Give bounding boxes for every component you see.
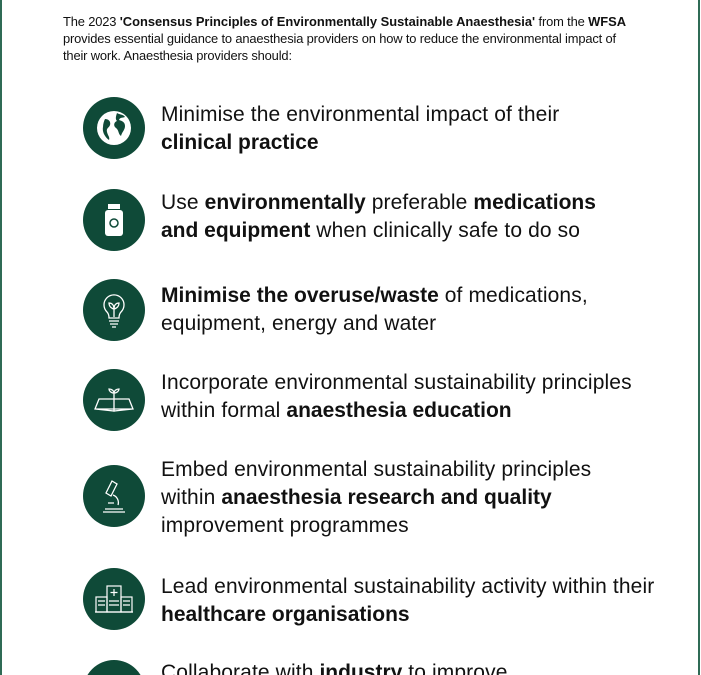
text: clinical practice	[161, 131, 319, 154]
intro text	[63, 14, 626, 63]
item 5: research	[83, 458, 591, 537]
text	[161, 458, 591, 537]
icon: circle	[83, 660, 145, 675]
text: within anaesthesia research and quality	[161, 486, 552, 509]
item 3: overuse	[83, 279, 588, 341]
text	[161, 371, 632, 422]
item 4: education	[83, 369, 632, 431]
text: Minimise the overuse/waste of medications,	[161, 284, 588, 307]
intro text: their work. Anaesthesia providers should:	[63, 48, 292, 63]
text: improvement programmes	[161, 514, 409, 537]
icon: microscope	[83, 465, 145, 527]
text: Incorporate environmental sustainability principles	[161, 371, 632, 394]
icon: globe	[83, 97, 145, 159]
text	[161, 191, 596, 242]
item 7: industry (cut off)	[88, 660, 508, 675]
item 2: medications	[83, 189, 596, 251]
text: healthcare organisations	[161, 603, 410, 626]
icon: medicine jar	[83, 189, 145, 251]
text	[161, 575, 654, 626]
text	[161, 103, 559, 154]
text: Use environmentally preferable medications	[161, 191, 596, 214]
icon: lightbulb	[83, 279, 145, 341]
text: Lead environmental sustainability activity within their	[161, 575, 654, 598]
item 1: clinical practice	[83, 97, 559, 159]
text: Minimise the environmental impact of their	[161, 103, 559, 126]
text: within formal anaesthesia education	[161, 399, 512, 422]
text: equipment, energy and water	[161, 312, 436, 335]
intro text: provides essential guidance to anaesthesia providers on how to reduce the environmental impact of	[63, 31, 616, 46]
icon: book	[83, 369, 145, 431]
icon: hospital	[83, 568, 145, 630]
item 6: healthcare organisations	[83, 568, 654, 630]
text	[161, 284, 588, 335]
intro text: The 2023 'Consensus Principles of Environmentally Sustainable Anaesthesia' from the WFSA	[63, 14, 626, 29]
text: Embed environmental sustainability principles	[161, 458, 591, 481]
text: and equipment when clinically safe to do so	[161, 219, 580, 242]
